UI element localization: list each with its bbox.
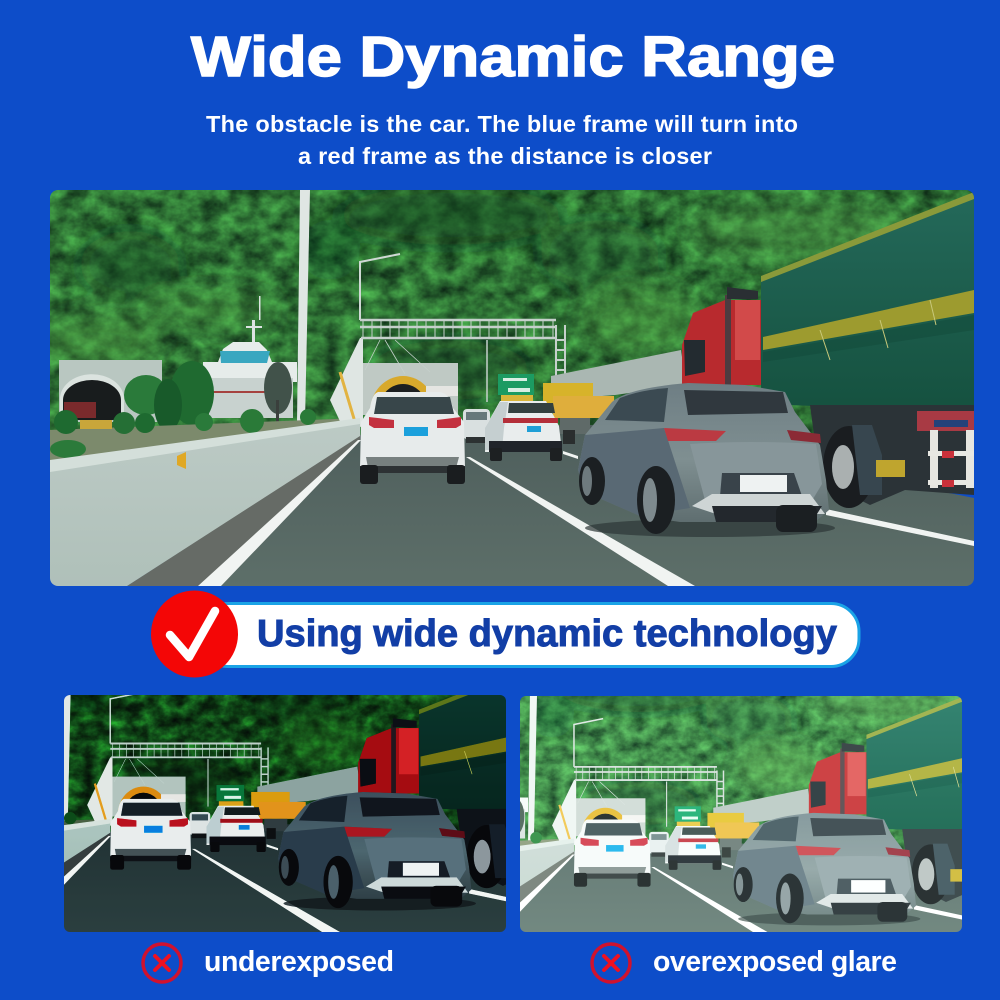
main photo: wide dynamic result (40, 185, 974, 586)
banner pill (200, 604, 859, 666)
underexposed photo (64, 695, 506, 932)
label: overexposed glare (653, 946, 897, 978)
caption: overexposed glare (592, 944, 897, 982)
subtitle (206, 111, 798, 169)
banner text: Using wide dynamic technology (257, 613, 837, 655)
overexposed photo (520, 696, 962, 932)
banner: using wide dynamic technology (151, 590, 859, 678)
caption: underexposed (143, 944, 394, 982)
icon: red cross (143, 944, 181, 982)
title: Wide Dynamic Range (191, 25, 835, 89)
subtitle: a red frame as the distance is closer (298, 143, 712, 169)
icon: red cross (592, 944, 630, 982)
icon: red check badge (151, 590, 238, 678)
subtitle: The obstacle is the car. The blue frame will turn into (206, 111, 798, 137)
label: underexposed (204, 946, 394, 978)
